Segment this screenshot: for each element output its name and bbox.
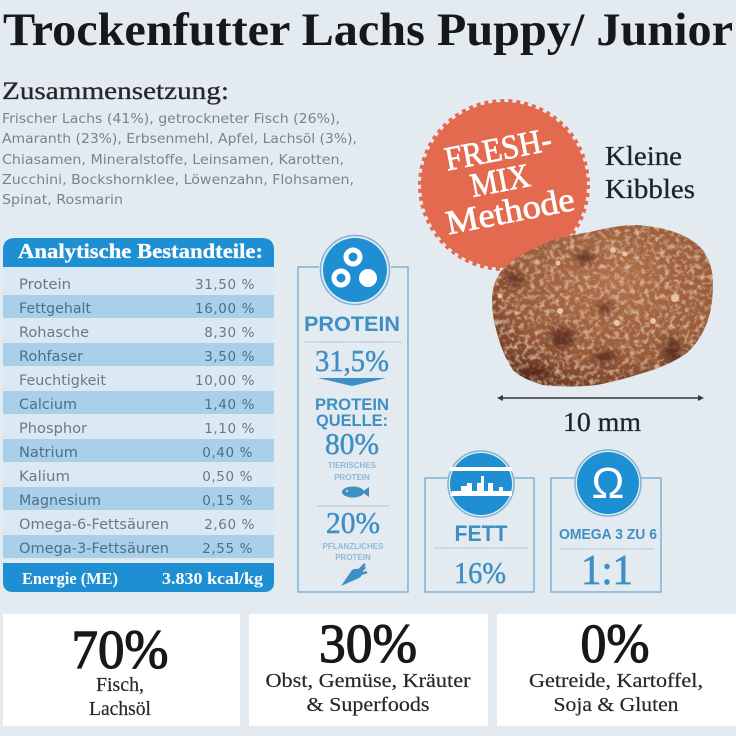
plant protein label: PFLANZLICHES [323,542,384,551]
icon: protein molecules [319,234,391,306]
animal protein label: PROTEIN [334,473,370,482]
table energy footer: Energie (ME) [22,569,118,588]
fett value: 16% [454,555,506,590]
composition ingredients: Amaranth (23%), Erbsenmehl, Apfel, Lachsöl (3%), [2,131,357,147]
table rows: 1,10 % [204,421,255,437]
table rows: 10,00 % [195,373,255,389]
protein label: PROTEIN [304,313,400,336]
protein value: 31,5% [315,343,389,378]
panel: 70 percent: Fisch, [96,674,144,696]
panel: 30 percent [249,613,488,726]
table rows: Kalium [19,469,70,485]
panel: fett [425,450,534,592]
icon: fat scale [447,450,515,518]
badge: fresh-mix methode [420,101,588,269]
panel: analytical table [3,238,274,592]
icon: carrot [341,564,367,586]
table rows: Rohasche [19,325,89,341]
composition ingredients: Chiasamen, Mineralstoffe, Leinsamen, Karotten, [2,152,344,168]
composition ingredients [2,111,357,208]
animal protein label [328,461,377,482]
panel: 30 percent: & Superfoods [306,694,430,716]
omega label: OMEGA 3 ZU 6 [559,526,657,543]
table rows: 0,50 % [202,469,253,485]
fett label: FETT [454,521,508,546]
icon: fish [342,486,369,498]
dimension label: 10 mm [563,407,641,437]
omega value: 1:1 [581,548,633,594]
table rows: Calcium [19,397,77,413]
badge: fresh-mix methode: Methode [443,181,578,242]
table rows: Omega-3-Fettsäuren [19,541,169,557]
panel: protein [298,234,408,592]
table rows: Fettgehalt [19,301,92,317]
table header [3,238,274,267]
table rows: Rohfaser [19,349,83,365]
animal protein label: TIERISCHES [328,461,377,470]
badge: fresh-mix methode: FRESH- [442,121,555,178]
plant protein value: 20% [326,505,380,540]
panel: 70 percent: 70% [72,619,168,680]
title: Trockenfutter Lachs Puppy/ Junior [3,4,733,56]
protein source label: QUELLE: [316,412,388,430]
animal protein value: 80% [325,426,379,461]
table rows: 2,55 % [202,541,253,557]
composition ingredients: Spinat, Rosmarin [2,192,123,208]
table rows: 31,50 % [195,277,255,293]
panel: 0 percent: Getreide, Kartoffel, [529,670,703,692]
composition ingredients: Zucchini, Bockshornklee, Löwenzahn, Flohsamen, [2,172,354,188]
plant protein label: PROTEIN [335,553,371,562]
panel: 30 percent: Obst, Gemüse, Kräuter [266,670,471,692]
kibble photo [488,222,718,392]
panel: 0 percent: Soja & Gluten [554,694,678,716]
protein source label: PROTEIN [315,396,389,414]
table rows: Protein [19,277,71,293]
table rows: Omega-6-Fettsäuren [19,517,169,533]
composition heading: Zusammensetzung: [2,78,229,105]
table rows: 1,40 % [204,397,255,413]
panel: 0 percent: 0% [580,613,650,674]
kibble size caption [605,141,695,204]
panel: 70 percent: Lachsöl [89,698,151,720]
panel: omega [551,449,661,594]
table rows: Magnesium [19,493,101,509]
panel: 30 percent: 30% [319,613,417,674]
icon: omega: Ω [592,459,624,508]
table rows: 16,00 % [195,301,255,317]
arrow: chevron divider [318,378,386,386]
table rows: 2,60 % [204,517,255,533]
kibble light grains [498,247,679,326]
composition ingredients: Frischer Lachs (41%), getrockneter Fisch (26%), [2,111,340,127]
table header: Analytische Bestandteile: [18,239,263,263]
table rows: 3,50 % [204,349,255,365]
table rows: 8,30 % [204,325,255,341]
table rows [3,267,274,560]
panel: 0 percent [497,613,736,726]
arrow: 10 mm dimension [497,395,704,401]
kibble size caption: Kleine [605,141,682,171]
composition text block [2,78,357,208]
table rows: Feuchtigkeit [19,373,107,389]
table rows: Natrium [19,445,78,461]
protein source label [315,396,389,430]
table rows: 0,15 % [202,493,253,509]
table energy footer: 3.830 kcal/kg [162,569,264,588]
table rows: Phosphor [19,421,87,437]
kibble dark spots [505,252,681,378]
plant protein label [323,542,384,562]
icon: omega [574,449,642,517]
table rows: 0,40 % [202,445,253,461]
badge: fresh-mix methode: MIX [467,157,533,205]
kibble size caption: Kibbles [605,174,695,204]
panel: 70 percent [3,614,240,726]
table energy footer [3,563,274,592]
